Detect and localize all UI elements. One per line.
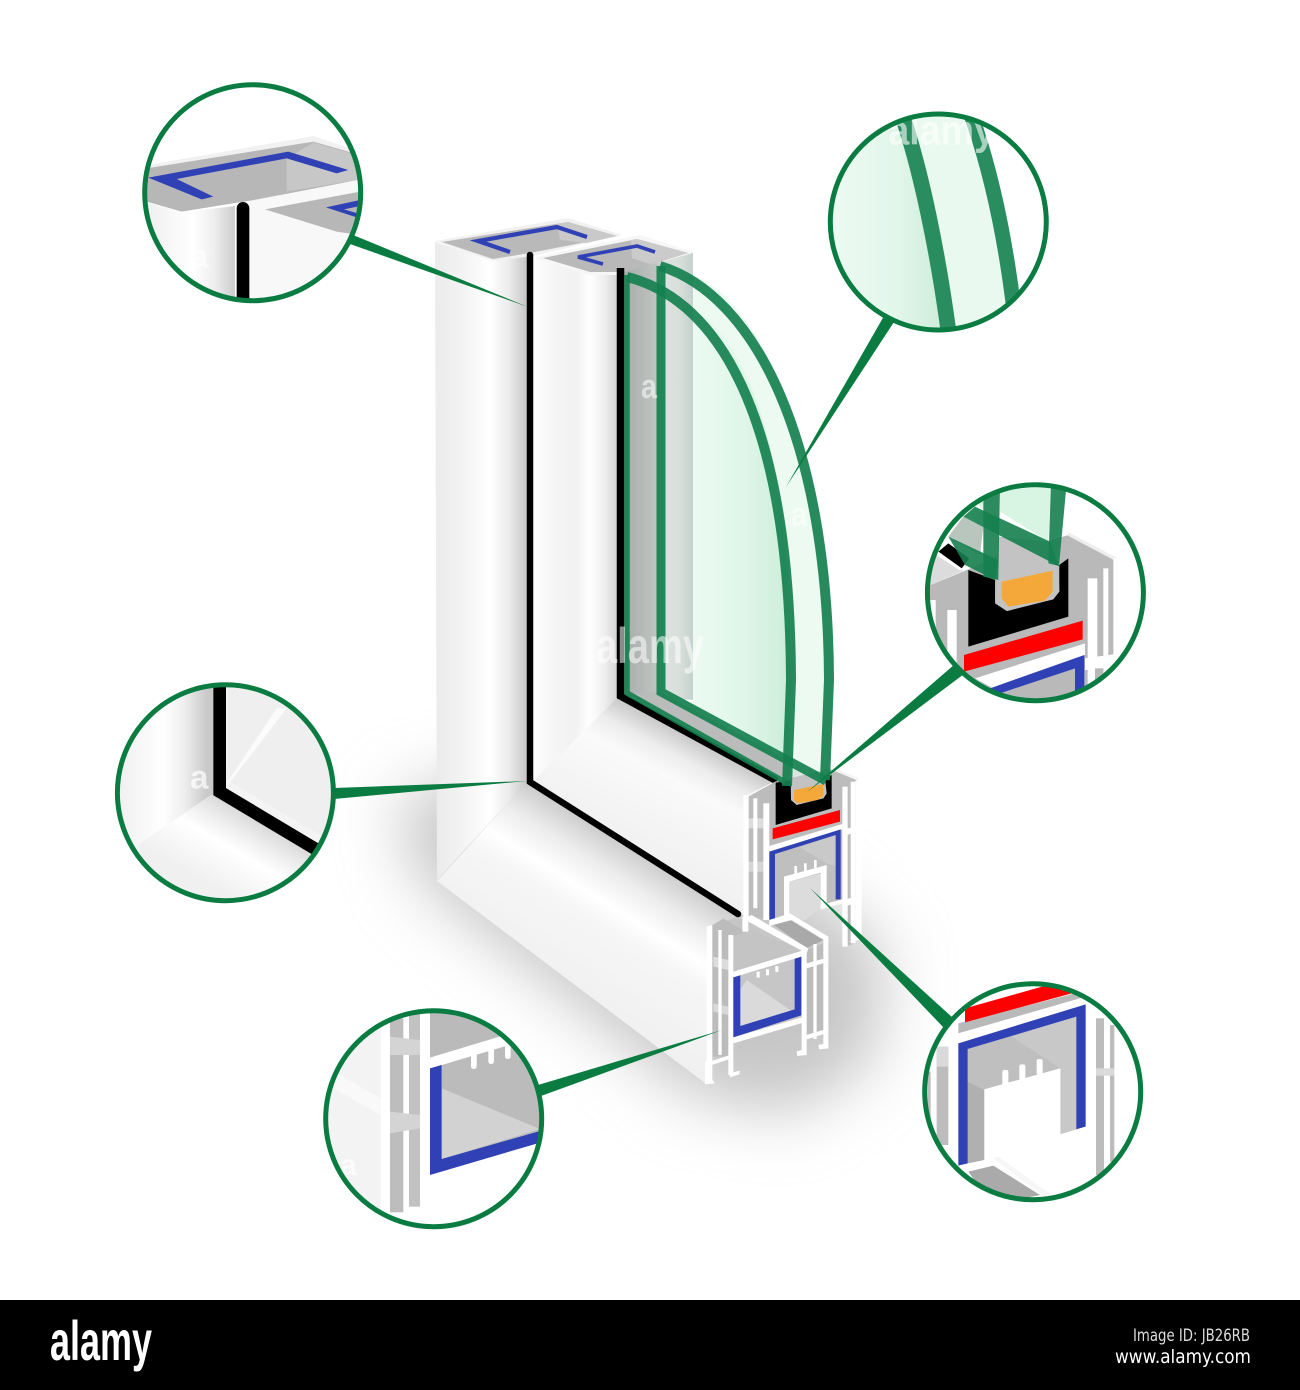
callout: corner weld — [110, 680, 340, 913]
blue bar in callout — [430, 1064, 543, 1175]
callout: double glazing — [825, 105, 1055, 335]
chamber in callout — [968, 1017, 1076, 1163]
leader line: glass — [786, 316, 894, 487]
white profile in callout — [980, 1059, 1086, 1161]
lower white profile — [733, 940, 828, 1056]
white band and teeth in callout — [430, 1036, 511, 1069]
leader line: reinforcement chamber — [810, 888, 953, 1028]
sash chamber interior — [775, 835, 836, 918]
red gasket in callout — [964, 621, 1083, 672]
profile cross section — [705, 768, 862, 1084]
black seat in callout — [968, 558, 1068, 647]
white separator — [769, 824, 842, 852]
blue steel reinforcement — [769, 829, 841, 920]
drop shadow under window profile — [395, 770, 885, 1115]
blue reinforcement in callout — [958, 1004, 1086, 1166]
leader line: corner weld — [334, 781, 527, 799]
spacer in callout — [996, 537, 1059, 611]
inner pane — [627, 277, 791, 786]
double glazing panes — [627, 266, 829, 786]
red gasket in callout — [965, 986, 1071, 1022]
inner chamber — [789, 873, 821, 920]
leader line: glazing seat — [807, 664, 964, 792]
gasket black lines — [530, 255, 777, 914]
watermark text: alamy — [596, 618, 704, 674]
glazing floor — [627, 692, 790, 784]
frame jamb — [435, 242, 527, 880]
sash stile — [533, 258, 617, 782]
watermark text — [596, 368, 808, 674]
callout: double glazing: alamy — [888, 106, 995, 153]
footer logo: alamy — [50, 1309, 152, 1372]
desiccant in callout — [1002, 571, 1053, 607]
callout: frame chamber — [320, 1005, 550, 1235]
leader line: frame chamber — [538, 1030, 722, 1096]
top cap of sash — [533, 235, 693, 275]
space between panes — [693, 276, 829, 777]
chamber in callout — [442, 1062, 540, 1159]
inner white profile — [784, 860, 842, 922]
rear profile seen through glass — [624, 253, 693, 700]
footer bar — [0, 1300, 1300, 1390]
lower section body — [705, 913, 828, 1084]
callout: glazing seat detail — [920, 480, 1150, 712]
upper section body — [743, 768, 862, 947]
callout: frame chamber: a — [340, 1149, 357, 1182]
spacer — [791, 772, 827, 805]
callout: top of frame: a — [190, 238, 209, 275]
white bars in callout — [930, 568, 1114, 688]
black glazing seat — [776, 775, 832, 825]
callout: top of frame — [140, 80, 370, 310]
watermark text: a — [641, 368, 658, 406]
red gasket — [773, 810, 840, 839]
inner pane tint — [693, 305, 791, 783]
window frame profile — [435, 218, 775, 1083]
callout: reinforcement chamber — [915, 975, 1145, 1208]
image id: Image ID: JB26RB — [1133, 1326, 1250, 1346]
glazing fill — [627, 276, 829, 785]
blue bar in callout — [990, 655, 1084, 693]
leader line: frame corner top — [350, 235, 528, 307]
callout: corner weld: a — [190, 759, 209, 796]
frame sill — [437, 782, 742, 1083]
desiccant — [794, 784, 823, 803]
lower chamber — [740, 962, 795, 1028]
top cap of frame — [435, 218, 622, 261]
green panes in callout — [948, 483, 1067, 580]
lower blue reinforcement — [733, 956, 801, 1037]
watermark text: a — [791, 496, 808, 534]
sash rail — [533, 698, 775, 915]
website: www.alamy.com — [1115, 1346, 1251, 1368]
outer pane — [660, 266, 829, 780]
mint glass in callout — [1000, 487, 1051, 542]
